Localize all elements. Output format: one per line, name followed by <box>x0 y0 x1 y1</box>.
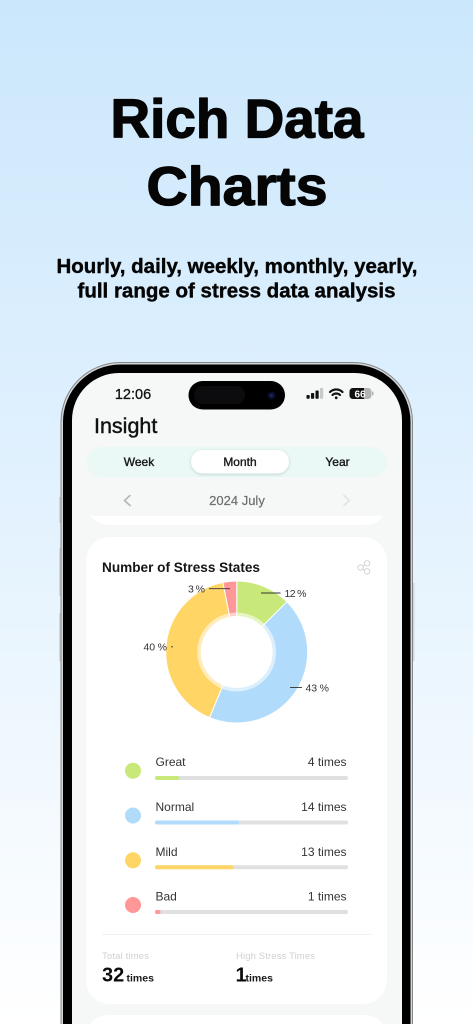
donut hole <box>201 616 273 688</box>
screen heading: Insight <box>94 414 157 438</box>
percent labels <box>144 584 329 694</box>
percent labels: 40 % <box>144 642 167 654</box>
callout lines <box>171 589 302 688</box>
legend row: mild: 13 times <box>301 845 346 859</box>
legend row: great <box>125 755 348 780</box>
stat: high stress times: High Stress Times <box>236 951 315 962</box>
subtitle <box>56 256 418 302</box>
phone frame <box>60 362 413 1024</box>
percent labels: 3 % <box>188 584 205 596</box>
tab control <box>87 447 387 477</box>
subtitle: full range of stress data analysis <box>78 280 396 302</box>
date selector: 2024 July <box>209 493 265 508</box>
legend row: great: Great <box>156 755 186 769</box>
segment: mild 40% <box>166 582 230 718</box>
tab control: Year <box>325 455 350 469</box>
phone side buttons <box>59 497 414 661</box>
segment: bad 3% <box>223 581 237 621</box>
stat: high stress times: times <box>246 972 273 984</box>
legend row: bad: 1 times <box>308 890 346 904</box>
tab control: Week <box>124 455 155 469</box>
date selector <box>124 493 350 508</box>
stat: total times: times <box>126 972 154 984</box>
panel: number of stress states <box>86 537 387 1004</box>
donut chart <box>144 581 329 723</box>
percent labels: 12 % <box>284 588 306 600</box>
stat: total times: 32 <box>102 964 124 986</box>
card heading: Number of Stress States <box>102 560 260 575</box>
percent labels: 43 % <box>306 682 329 694</box>
wifi icon <box>330 389 342 399</box>
legend row: bad <box>125 892 348 914</box>
battery icon <box>350 388 374 399</box>
title: Charts <box>146 155 328 217</box>
legend row: mild: Mild <box>156 845 178 859</box>
tab control: Month <box>223 455 257 469</box>
icon: share <box>358 561 370 574</box>
title <box>110 88 364 217</box>
status bar time: 12:06 <box>115 387 151 403</box>
stat: high stress times: 1 <box>236 964 247 986</box>
previous card edge <box>91 516 383 525</box>
legend row: great: 4 times <box>308 755 346 769</box>
tab: month active <box>191 450 289 474</box>
battery icon: 66 <box>354 390 366 400</box>
legend row: mild <box>125 845 348 869</box>
segment: normal 43% <box>210 602 308 723</box>
legend row: bad: Bad <box>156 890 177 904</box>
signal icon <box>306 388 323 399</box>
subtitle: Hourly, daily, weekly, monthly, yearly, <box>56 256 418 278</box>
segment: great 12% <box>237 581 287 629</box>
stat: total times <box>102 952 154 982</box>
legend row: normal: Normal <box>156 800 194 814</box>
legend row: normal: 14 times <box>301 800 346 814</box>
title: Rich Data <box>110 88 364 150</box>
stat: high stress times <box>236 952 315 982</box>
stat: total times: Total times <box>102 951 149 962</box>
legend row: normal <box>125 802 348 824</box>
phone mockup <box>59 362 414 1024</box>
dynamic island <box>188 381 285 410</box>
phone screen <box>72 373 402 1024</box>
next card <box>86 1015 387 1024</box>
inner translucent ring <box>197 612 276 692</box>
